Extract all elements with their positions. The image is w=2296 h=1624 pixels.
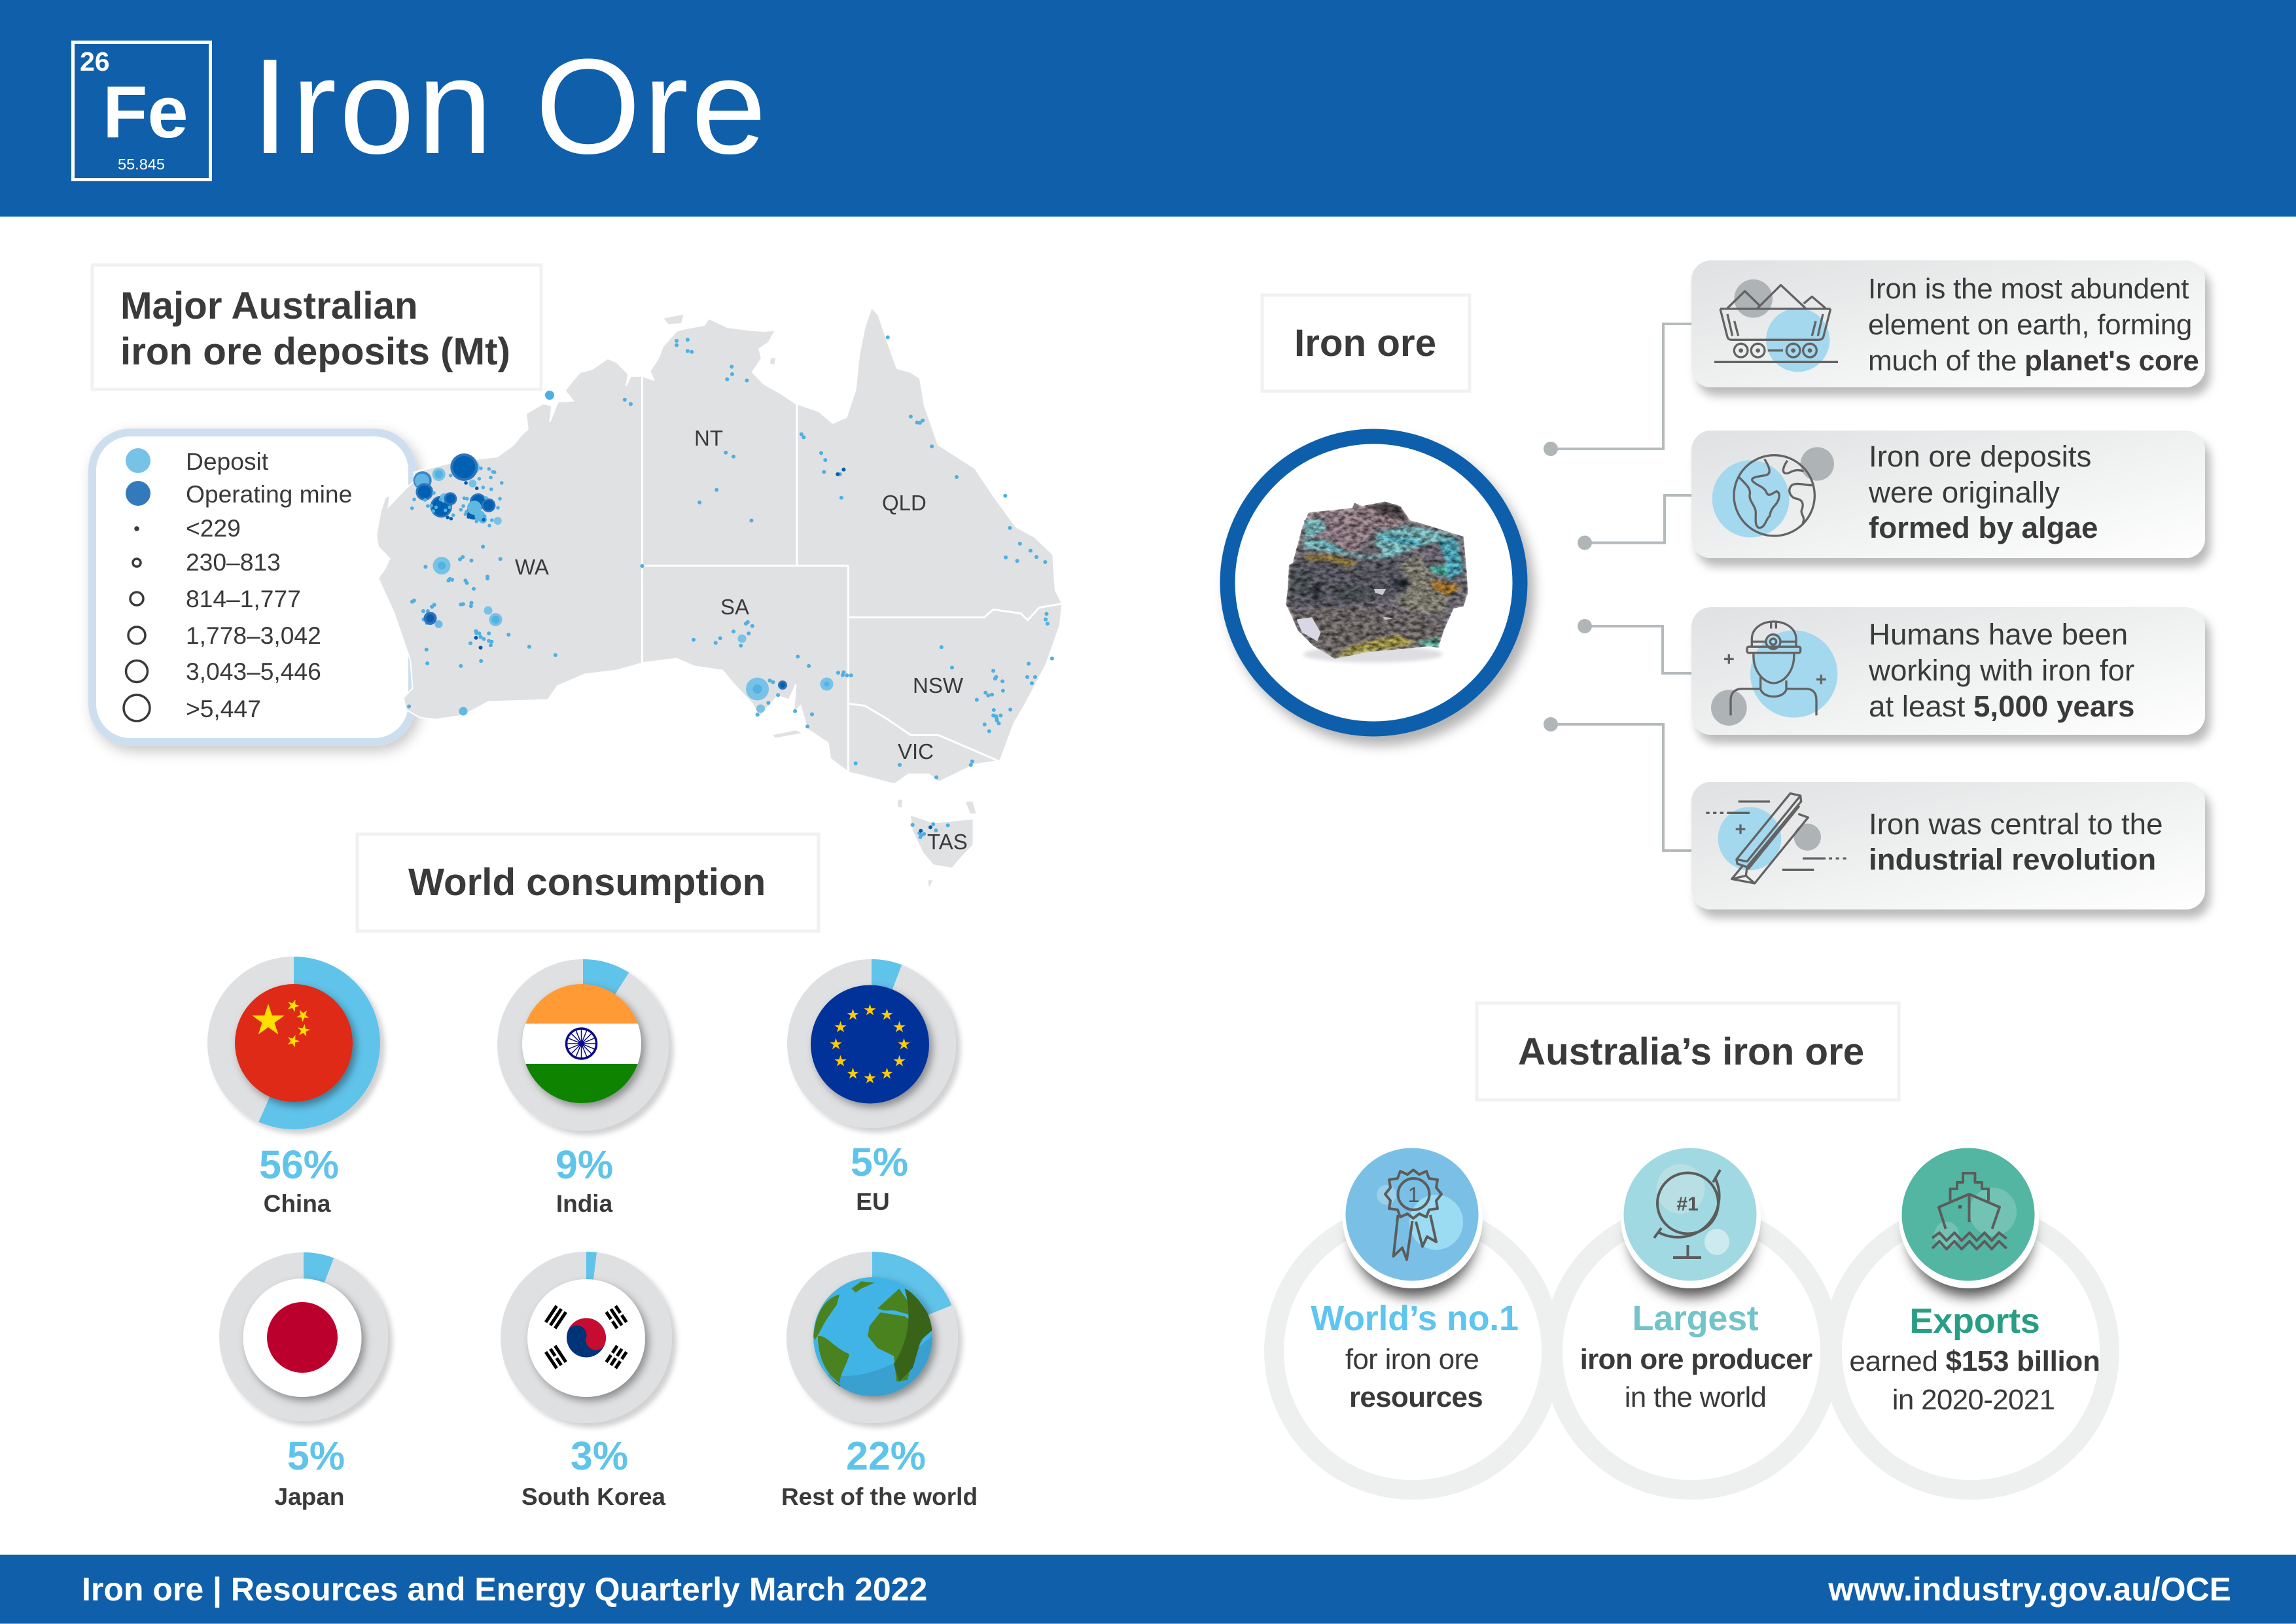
icon: ship	[1932, 1173, 2017, 1249]
footer: url: www.industry.gov.au/OCE	[1828, 1571, 2231, 1608]
legend: labels: 1,778–3,042	[186, 622, 321, 649]
map: state labels: WA	[515, 555, 549, 579]
element tile: Fe: 26	[80, 46, 110, 77]
donut: Rest of the world 22%	[781, 1252, 978, 1510]
map: state labels: NSW	[913, 673, 964, 697]
icon: rosette	[1377, 1170, 1463, 1260]
heading: Australia's iron ore: Australia’s iron ore	[1518, 1031, 1864, 1073]
text: World’s no.1	[1311, 1299, 1519, 1338]
legend: labels: 3,043–5,446	[186, 658, 321, 685]
panel: Australia's iron ore stats	[1274, 1148, 2110, 1490]
donut: China 56%: China	[264, 1190, 331, 1217]
heading: major deposits: Major Australian	[120, 285, 418, 327]
stat: world's no.1: for iron ore	[1345, 1343, 1479, 1375]
element tile: Fe: Fe	[103, 71, 188, 153]
map of Australia	[376, 308, 1062, 887]
element tile: Fe: 55.845	[118, 156, 165, 173]
card: industrial revolution	[1691, 782, 2205, 909]
connector lines	[1544, 324, 1691, 851]
card: formed by algae	[1691, 431, 2205, 558]
card text: Iron is the most abundent	[1868, 273, 2189, 305]
card: abundant element: element on earth, forming	[1868, 309, 2192, 341]
card: 5,000 years: working with iron for	[1868, 654, 2134, 687]
legend: labels: 814–1,777	[186, 585, 301, 612]
stat: exports: in 2020-2021	[1892, 1384, 2055, 1416]
card: abundant element	[1691, 260, 2205, 387]
legend: labels	[186, 448, 352, 722]
panel: world consumption donuts	[207, 957, 978, 1510]
card text: Iron ore deposits	[1869, 440, 2091, 473]
legend: labels: >5,447	[186, 695, 261, 722]
legend: labels: Operating mine	[186, 480, 352, 508]
heading: major deposits: iron ore deposits (Mt)	[120, 330, 510, 373]
icon: globe continents	[813, 1281, 937, 1403]
legend	[92, 432, 412, 742]
donut: India 9%: India	[556, 1190, 613, 1217]
map: state labels: NT	[694, 426, 723, 450]
donut: EU 5%: 5%	[851, 1140, 908, 1184]
legend: size scale circles	[124, 527, 150, 721]
rock photo	[1286, 502, 1468, 663]
legend: deposit swatch	[126, 448, 150, 473]
icon: rosette: 1	[1408, 1183, 1419, 1207]
legend: operating mine swatch	[126, 481, 150, 506]
legend: labels: <229	[186, 514, 241, 542]
map: state labels: VIC	[898, 739, 934, 764]
legend: labels: 230–813	[186, 548, 281, 576]
header band	[0, 0, 2296, 217]
donut: Rest of the world 22%: 22%	[846, 1434, 926, 1478]
footer band	[0, 1555, 2296, 1624]
card text: Humans have been	[1869, 618, 2128, 651]
legend: labels: Deposit	[186, 448, 269, 475]
map: larger bubbles outside the Pilbara	[424, 391, 834, 716]
icon: desk globe: #1	[1676, 1193, 1699, 1215]
text: Exports	[1910, 1301, 2040, 1341]
heading: world consumption: World consumption	[408, 861, 766, 904]
donut: South Korea 3%: South Korea	[521, 1483, 665, 1510]
heading: iron ore	[1262, 295, 1470, 391]
stat: largest producer: in the world	[1625, 1381, 1766, 1413]
stat: world's no.1	[1274, 1148, 1551, 1490]
donut: Japan 5%: Japan	[275, 1483, 344, 1510]
stat: exports: earned $153 billion	[1849, 1345, 2100, 1377]
iron ore rock in circle	[1227, 436, 1520, 729]
heading: world consumption	[357, 834, 819, 931]
card: 5,000 years: at least 5,000 years	[1869, 690, 2134, 723]
donut: South Korea 3%	[501, 1252, 672, 1510]
stat: largest producer	[1553, 1148, 1830, 1490]
title: Iron Ore	[251, 31, 769, 182]
map: state labels: TAS	[927, 830, 968, 854]
footer: source: Iron ore | Resources and Energy Quarterly March 2022	[82, 1571, 927, 1608]
icon: miner	[1711, 622, 1837, 726]
icon: desk globe	[1654, 1164, 1729, 1258]
donut: Japan 5%	[219, 1252, 388, 1510]
heading: Australia's iron ore	[1477, 1003, 1899, 1100]
donut: India 9%: 9%	[556, 1142, 613, 1187]
element tile: Fe	[73, 42, 211, 179]
card: formed by algae: formed by algae	[1869, 511, 2098, 544]
donut: EU 5%: EU	[856, 1188, 890, 1215]
donut: China 56%	[207, 957, 380, 1217]
stat: world's no.1: resources	[1349, 1381, 1483, 1413]
map: scattered deposits	[409, 338, 1052, 837]
donut: South Korea 3%: 3%	[571, 1434, 628, 1478]
card: industrial revolution: industrial revolution	[1869, 843, 2156, 876]
icon: mine cart	[1714, 279, 1838, 372]
map: state labels	[515, 426, 968, 854]
heading: iron ore: Iron ore	[1294, 322, 1436, 364]
stat: largest producer: iron ore producer	[1580, 1343, 1812, 1375]
icon: earth globe	[1712, 447, 1834, 537]
map: state labels: QLD	[882, 491, 927, 515]
map: state labels: SA	[720, 595, 749, 619]
map: landmass and state borders	[376, 308, 1062, 887]
stat: exports	[1832, 1148, 2110, 1490]
donut: India 9%	[497, 959, 669, 1217]
donut: EU 5%	[787, 959, 956, 1215]
card: abundant element: much of the planet's core	[1868, 345, 2199, 377]
card: formed by algae: were originally	[1868, 476, 2060, 509]
map: Pilbara cluster	[412, 453, 502, 546]
text: Largest	[1633, 1299, 1759, 1338]
icon: steel rail	[1706, 794, 1846, 883]
ring	[1227, 436, 1520, 729]
heading: major deposits	[92, 265, 541, 389]
donut: China 56%: 56%	[259, 1142, 339, 1187]
card: 5,000 years	[1691, 607, 2205, 735]
donut: Rest of the world 22%: Rest of the world	[781, 1483, 978, 1510]
card text: Iron was central to the	[1869, 807, 2163, 841]
donut: Japan 5%: 5%	[287, 1434, 345, 1478]
